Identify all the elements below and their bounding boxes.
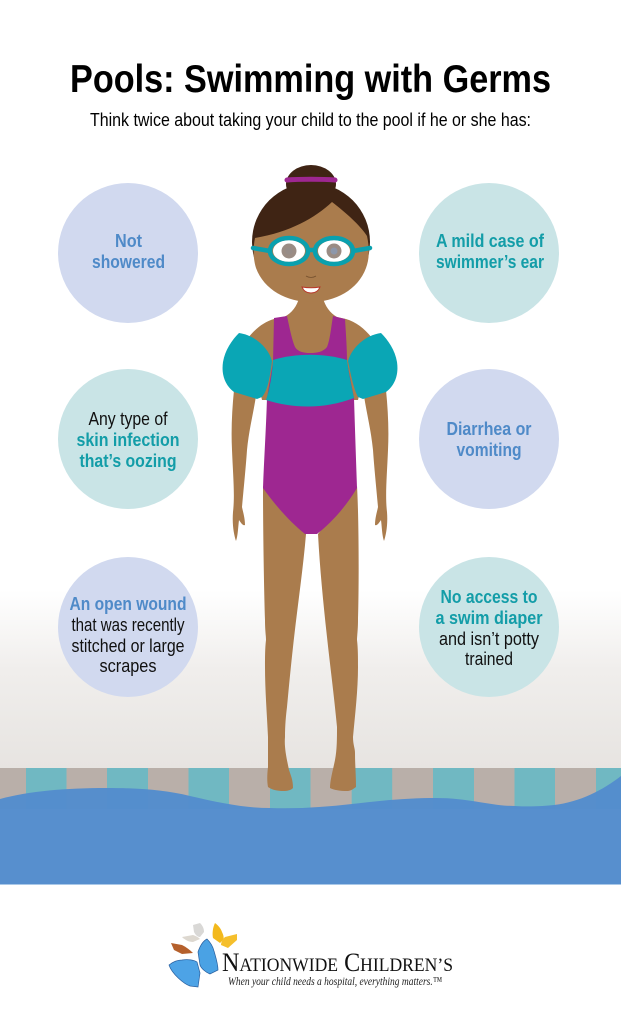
circle: open wound: stitched or large [72,636,184,656]
left leg [263,486,306,791]
icon: blue butterfly [169,939,218,987]
circle: swimmer's ear: A mild case of [436,231,545,251]
circle: open wound: that was recently [72,615,184,635]
bun [286,165,336,203]
circle: not showered [58,183,198,323]
girl figure [223,165,397,791]
circle: skin infection [58,369,198,509]
hair [252,183,370,301]
circle: skin infection: skin infection [76,430,180,450]
circle: swim diaper: a swim diaper [436,608,542,628]
logo tagline: When your child needs a hospital, everything matters.™ [228,974,442,988]
neck and shoulders [248,298,372,400]
left armband [223,333,272,399]
subtitle: Think twice about taking your child to the pool if he or she has: [90,110,531,130]
teal chest band [266,355,354,407]
circle: swim diaper: trained [465,649,513,669]
circle: not showered: Not [115,231,142,251]
circle: swim diaper [419,557,559,697]
circle: swim diaper: and isn’t potty [439,629,539,649]
circle: not showered: showered [92,252,165,272]
circle: skin infection: that’s oozing [80,451,176,471]
circle: open wound [58,557,198,697]
circle: swim diaper: No access to [440,587,538,607]
logo: Nationwide Children's [169,923,453,988]
title: Pools: Swimming with Germs [70,58,551,101]
circle: diarrhea or vomiting [419,369,559,509]
circle: open wound: scrapes [100,656,156,676]
icon: yellow butterfly [213,923,237,948]
circle: swimmer's ear: swimmer’s ear [436,252,544,272]
mouth [302,287,320,293]
swimsuit [263,316,357,534]
hair band [287,177,335,182]
logo wordmark: NATIONWIDE CHILDREN’S [222,948,453,977]
pool edge tiles [0,768,621,809]
goggles [253,238,370,264]
pool water [0,776,621,884]
right leg [318,486,359,791]
circle: diarrhea or vomiting: Diarrhea or [446,419,532,439]
water bottom edge [0,884,621,885]
nose [306,276,316,278]
circle: skin infection: Any type of [88,409,168,429]
icon: orange butterfly [171,943,193,954]
circle: open wound: An open wound [70,594,186,614]
right armband [348,333,397,399]
right arm [364,390,388,541]
circle: diarrhea or vomiting: vomiting [456,440,522,460]
left arm [232,390,256,541]
face [254,202,369,302]
circle: swimmer's ear [419,183,559,323]
pool deck background [0,590,621,768]
icon: white butterfly [182,923,204,942]
